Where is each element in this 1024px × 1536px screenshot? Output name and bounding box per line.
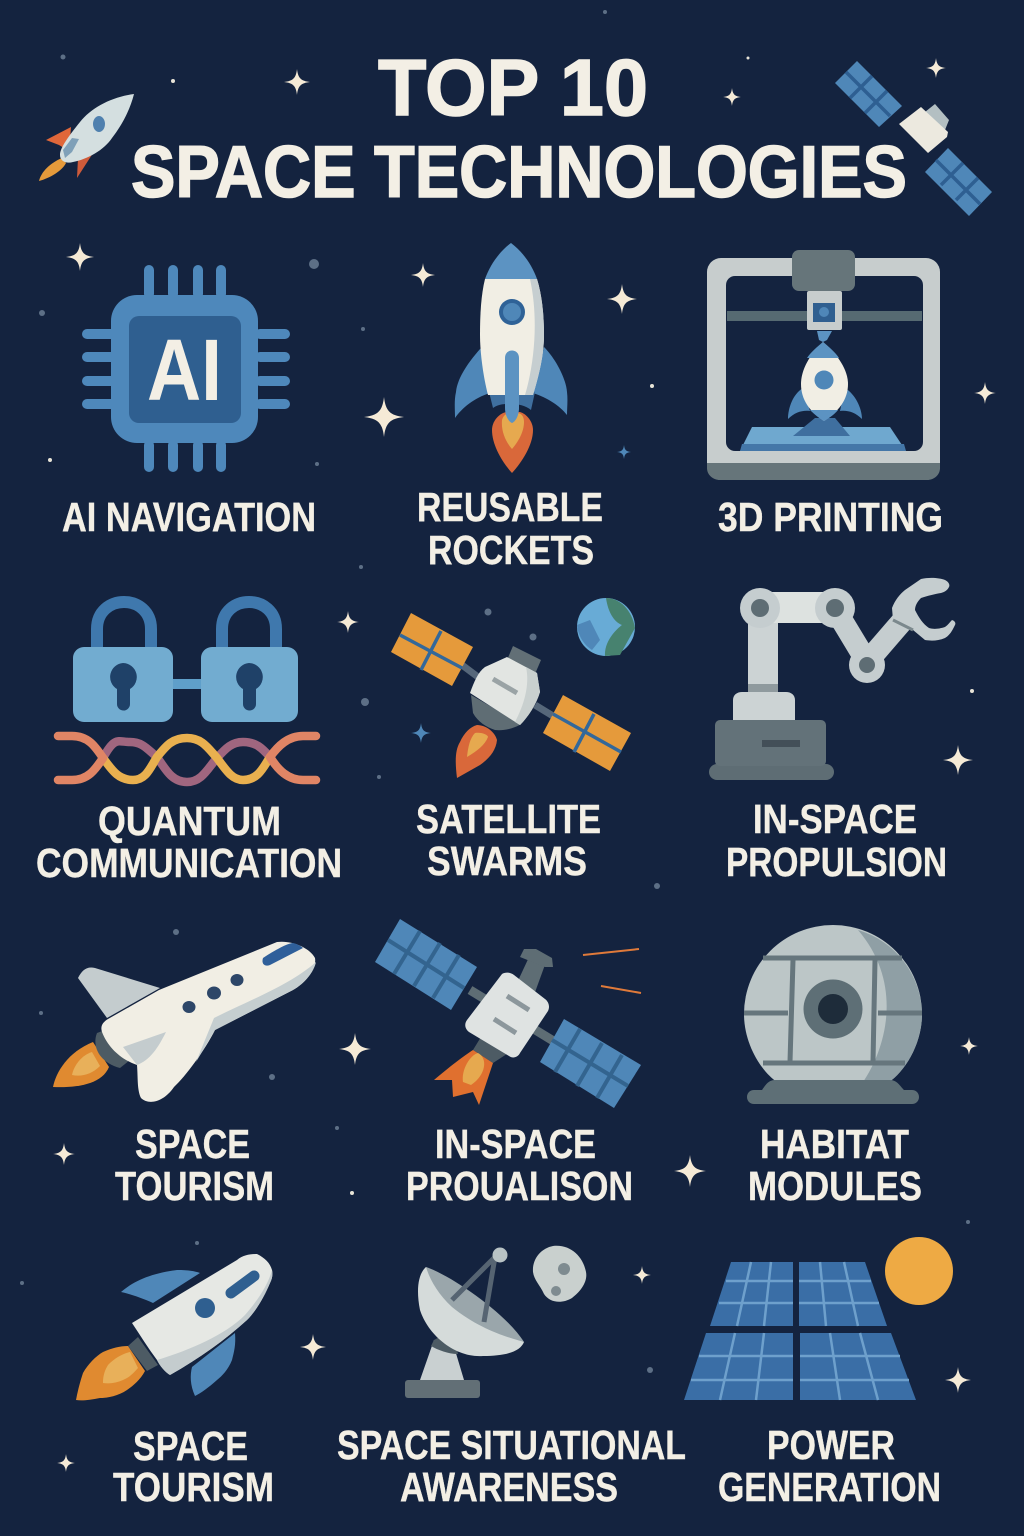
label: AI navigation: AI NAVIGATION xyxy=(62,494,316,540)
label: in-space propulsion: IN-SPACE xyxy=(753,796,917,842)
icon: quantum locks and wave xyxy=(58,602,316,782)
label: space tourism: SPACE xyxy=(135,1121,250,1167)
label: quantum communication xyxy=(36,798,342,886)
icon: angled rocket xyxy=(76,1254,272,1400)
icon: top satellite xyxy=(835,61,992,216)
label: power generation: POWER xyxy=(767,1422,895,1468)
label: space tourism: TOURISM xyxy=(115,1163,274,1209)
label: in-space proualison xyxy=(406,1121,633,1209)
label: in-space propulsion: PROPULSION xyxy=(726,839,947,885)
label: 3D printing: 3D PRINTING xyxy=(718,494,943,540)
label: space tourism: TOURISM xyxy=(113,1464,274,1510)
icon: reusable rocket xyxy=(455,243,567,473)
label: quantum communication: COMMUNICATION xyxy=(36,840,342,886)
label: space tourism xyxy=(115,1121,274,1209)
icon: space shuttle xyxy=(53,942,316,1102)
title: SPACE TECHNOLOGIES xyxy=(131,132,907,213)
label: space tourism: SPACE xyxy=(133,1423,248,1469)
label: satellite swarms: SWARMS xyxy=(427,838,587,884)
icon: 3D printer xyxy=(707,250,940,480)
label: in-space proualison: IN-SPACE xyxy=(435,1121,596,1167)
label: satellite swarms: SATELLITE xyxy=(416,796,601,842)
icon: radar dish and asteroid xyxy=(405,1246,586,1398)
icon: AI chip: AI xyxy=(147,322,222,419)
icon: satellite with earth xyxy=(391,598,635,778)
label: reusable rockets: ROCKETS xyxy=(428,527,594,573)
title: TOP 10 xyxy=(378,43,648,132)
icon: robot arm xyxy=(709,578,955,780)
label: reusable rockets: REUSABLE xyxy=(417,484,603,530)
icon: solar panel and sun xyxy=(684,1237,953,1400)
label: space tourism xyxy=(113,1423,274,1510)
label: satellite swarms xyxy=(416,796,601,884)
label: reusable rockets xyxy=(417,484,603,573)
label: habitat modules: MODULES xyxy=(748,1163,922,1209)
label: habitat modules xyxy=(748,1121,922,1209)
label: space situational awareness: AWARENESS xyxy=(400,1464,618,1510)
title xyxy=(131,43,907,213)
label: habitat modules: HABITAT xyxy=(760,1121,909,1167)
icon: AI chip xyxy=(82,265,290,472)
label: power generation xyxy=(718,1422,941,1510)
label: space situational awareness xyxy=(337,1422,686,1510)
label: power generation: GENERATION xyxy=(718,1464,941,1510)
label: in-space propulsion xyxy=(726,796,947,885)
icon: satellite with thruster xyxy=(375,919,641,1108)
icon: small rocket xyxy=(39,94,134,181)
icon: habitat module xyxy=(744,925,922,1104)
label: quantum communication: QUANTUM xyxy=(98,798,281,844)
label: in-space proualison: PROUALISON xyxy=(406,1163,633,1209)
label: space situational awareness: SPACE SITUATIONAL xyxy=(337,1422,686,1468)
